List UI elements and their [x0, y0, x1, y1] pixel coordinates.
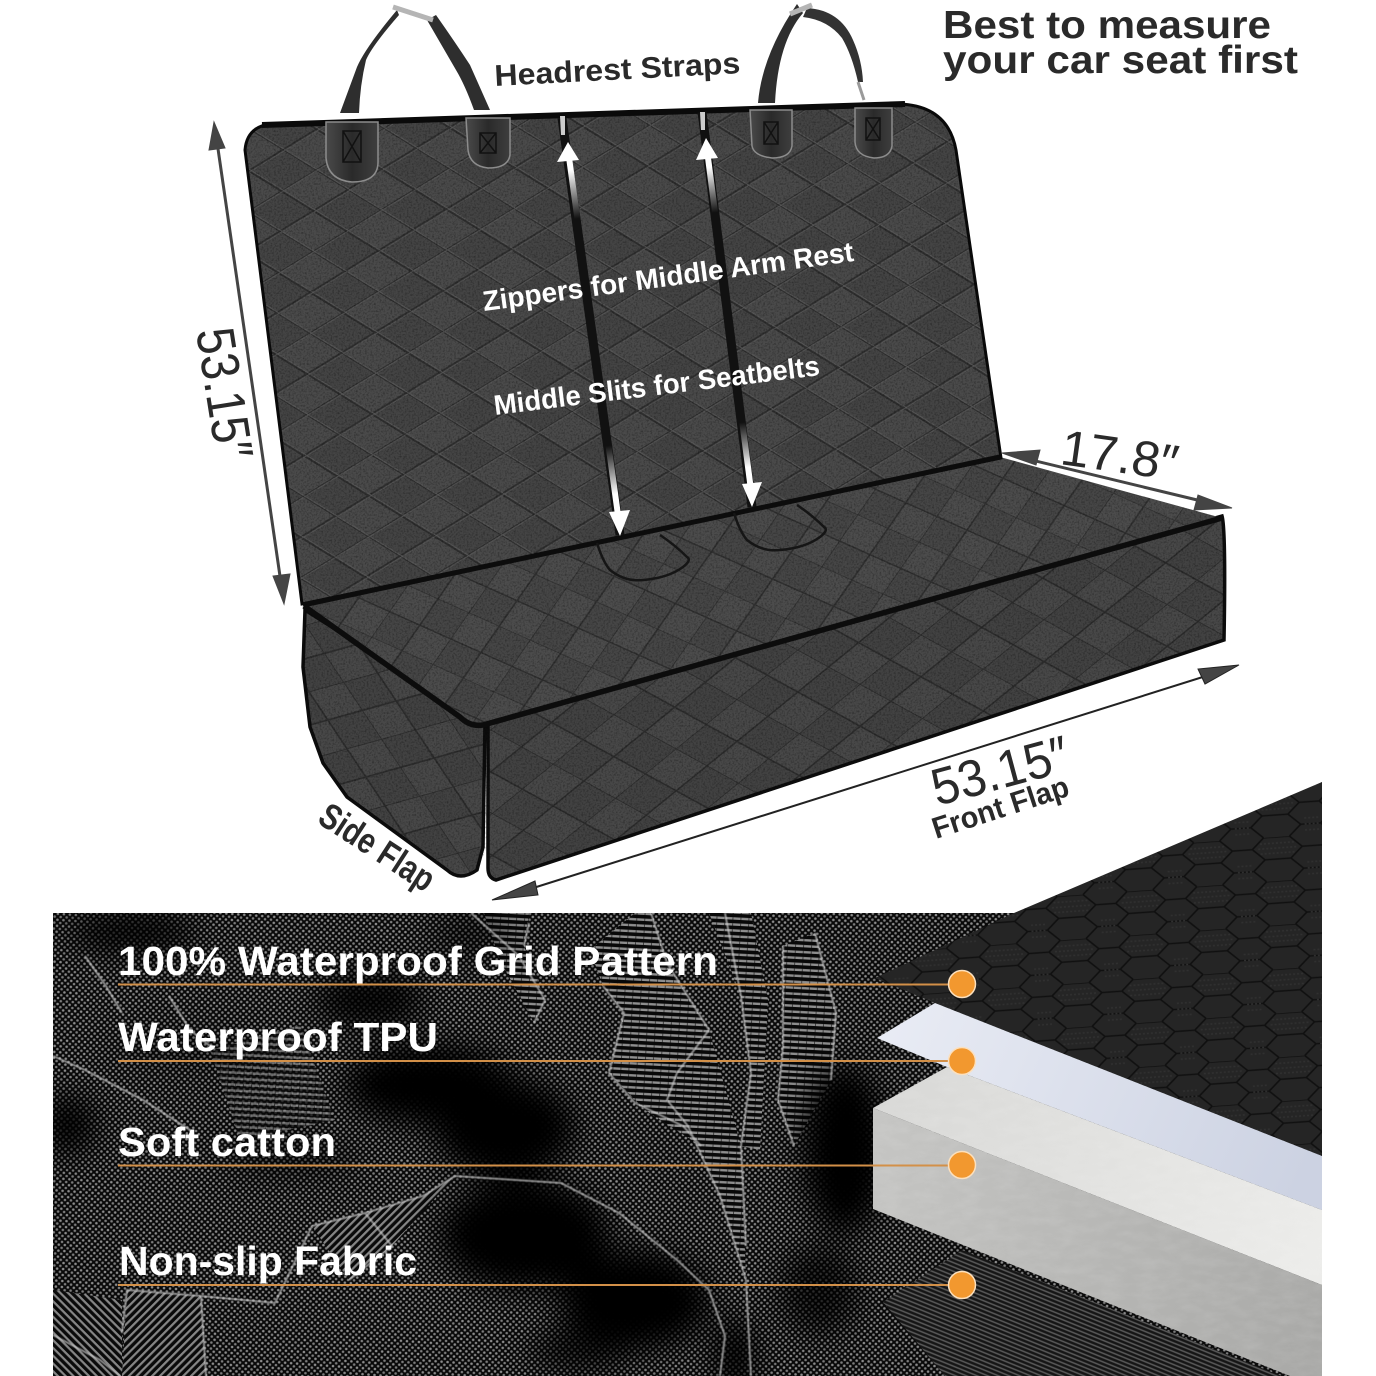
title: measure your seat	[943, 4, 1298, 82]
callout: grid pattern: 100% Waterproof Grid Pattern	[118, 938, 718, 984]
label: headrest straps: Headrest Straps	[494, 47, 741, 93]
title: measure your seat: your car seat first	[943, 39, 1298, 82]
dimension arrow: seat depth	[1002, 450, 1232, 510]
back panel	[245, 104, 1001, 604]
dimension label: front width: 53.15″	[925, 725, 1075, 818]
callout: non-slip fabric: Non-slip Fabric	[119, 1238, 417, 1284]
layer: non-slip fabric	[883, 1250, 1282, 1376]
strap tab right outer	[855, 108, 892, 158]
seatbelt slit left	[597, 535, 689, 580]
dimension label: seat depth: 17.8″	[1057, 419, 1182, 491]
callout: grid pattern	[118, 938, 976, 998]
layer: grid fabric	[875, 782, 1322, 1156]
headrest straps	[340, 4, 864, 113]
seatbelt slit right	[734, 505, 826, 550]
hexagon seams	[53, 913, 836, 1376]
dimension arrow: front width	[492, 665, 1239, 900]
side flap	[303, 610, 485, 876]
label: front flap: Front Flap	[928, 770, 1073, 846]
front flap	[488, 516, 1225, 880]
seat surface	[304, 457, 1222, 725]
callout: soft cotton	[118, 1119, 976, 1178]
label: middle slits: Middle Slits for Seatbelts	[492, 350, 821, 421]
texture overlay	[245, 104, 1225, 880]
dimension arrow: back height	[209, 122, 290, 604]
seat front seam	[304, 518, 1222, 725]
callout: soft cotton: Soft catton	[118, 1119, 336, 1165]
panel: fabric close-up background	[40, 910, 1322, 1376]
strap tab right inner	[750, 110, 792, 158]
seat and back seam	[303, 457, 1000, 605]
label: zippers: Zippers for Middle Arm Rest	[481, 236, 855, 317]
top binding	[262, 104, 905, 125]
zipper arrow right	[696, 112, 762, 507]
layer: soft cotton	[873, 1067, 1322, 1376]
strap tab left outer	[326, 122, 378, 182]
title: measure your seat: Best to measure	[943, 4, 1271, 47]
seat cover	[245, 104, 1225, 880]
strap tab left inner	[466, 118, 510, 168]
dimension label: back height: 53.15″	[184, 323, 264, 463]
label: side flap: Side Flap	[312, 794, 443, 900]
callout: waterproof TPU	[118, 1014, 976, 1074]
layer: TPU membrane	[877, 1003, 1322, 1210]
zipper arrow left	[557, 116, 630, 536]
callout: waterproof TPU: Waterproof TPU	[118, 1014, 438, 1060]
callout: non-slip fabric	[118, 1238, 976, 1298]
